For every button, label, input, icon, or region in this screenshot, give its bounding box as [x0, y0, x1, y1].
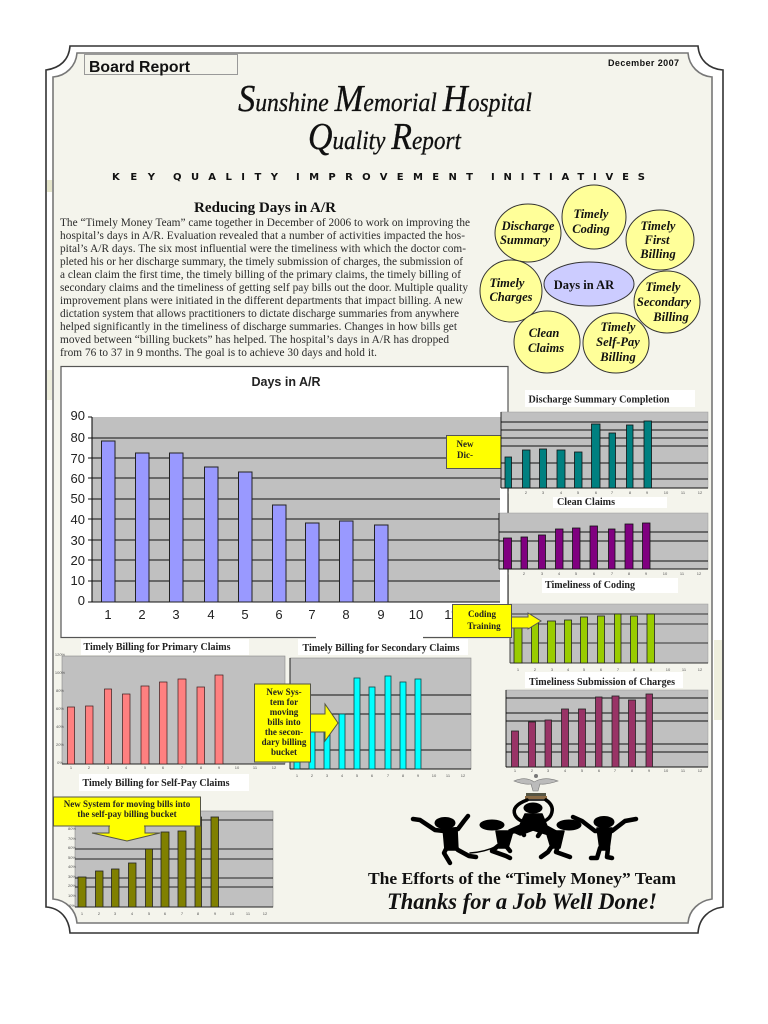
bubble: timely first billing: First — [643, 233, 670, 247]
chart: timeliness submission of charges — [506, 672, 708, 773]
main chart: days in A/R: 5 — [241, 607, 249, 622]
article text: improvement plans were initiated in the different departments that impact billing. A new — [60, 295, 464, 307]
main chart: days in A/R: 90 — [71, 408, 85, 423]
chart: timeliness submission of charges: 11 — [681, 768, 686, 773]
main chart: days in A/R: 50 — [71, 491, 85, 506]
chart: timely billing for secondary claims: Timely Billing for Secondary Claims — [302, 643, 460, 654]
main chart: days in A/R: 10 — [71, 573, 85, 588]
chart: timely billing for self-pay claims: 60% — [68, 845, 76, 850]
bubble: timely self-pay billing: Timely — [601, 320, 636, 334]
board report label: Board Report — [89, 59, 191, 76]
chart: timeliness submission of charges: 1 — [514, 768, 517, 773]
chart: timely billing for primary claims: Timely Billing for Primary Claims — [84, 642, 231, 653]
chart: timely billing for primary claims: 12 — [272, 765, 277, 770]
title: Quality Report — [308, 116, 462, 158]
chart: timeliness of coding: 8 — [633, 667, 636, 672]
article text: hospital’s days in A/R. Evaluation revealed that a number of activities impacted the hos- — [60, 230, 465, 242]
article text: secondary claims and the timeliness of getting self pay bills out the door. Multiple quality — [60, 282, 468, 294]
chart: timely billing for self-pay claims: 11 — [246, 911, 251, 916]
callout: new dictation: Dic- — [457, 450, 473, 460]
bubble: timely coding: Coding — [572, 222, 610, 236]
chart: timeliness submission of charges: Timeliness Submission of Charges — [529, 677, 675, 688]
chart: timely billing for primary claims: 7 — [181, 765, 184, 770]
page frame — [46, 46, 723, 933]
chart: timely billing for primary claims: 60% — [56, 706, 64, 711]
chart: clean claims: 4 — [558, 571, 561, 576]
chart: timeliness submission of charges: 5 — [581, 768, 584, 773]
callout: coding training: Coding — [468, 609, 497, 619]
main chart: days in A/R: 10 — [409, 607, 423, 622]
chart: timely billing for primary claims: 120% — [55, 652, 66, 657]
chart: timeliness of coding: 2 — [534, 667, 537, 672]
chart: timely billing for secondary claims: 5 — [356, 773, 359, 778]
chart: timely billing for self-pay claims: 30% — [68, 874, 76, 879]
callout: new system secondary billing: the secon- — [265, 727, 303, 737]
chart: clean claims: 12 — [697, 571, 702, 576]
chart: discharge summary completion: 1 — [507, 490, 510, 495]
icon: trophy on books — [514, 774, 558, 801]
bubble: timely coding: Timely — [574, 207, 609, 221]
bubble: discharge summary: Summary — [500, 233, 550, 247]
chart: timeliness submission of charges: 9 — [648, 768, 651, 773]
chart: timely billing for primary claims: 2 — [88, 765, 91, 770]
chart: discharge summary completion: 9 — [646, 490, 649, 495]
chart: clean claims: 10 — [663, 571, 668, 576]
chart: timely billing for primary claims: 40% — [56, 724, 64, 729]
main chart: days in A/R — [61, 366, 508, 640]
chart: discharge summary completion: 2 — [525, 490, 528, 495]
chart: timely billing for secondary claims: 4 — [341, 773, 344, 778]
chart: timely billing for primary claims: 0% — [57, 760, 63, 765]
chart: timeliness submission of charges: 4 — [564, 768, 567, 773]
callout: new system secondary billing: bucket — [271, 747, 297, 757]
bubble: timely secondary billing: Secondary — [637, 295, 692, 309]
chart: timely billing for secondary claims: 7 — [387, 773, 390, 778]
figure: far left — [413, 816, 497, 863]
main chart: days in A/R: 7 — [308, 607, 316, 622]
chart: timely billing for primary claims: 3 — [107, 765, 110, 770]
board report label — [84, 54, 238, 76]
article text: The “Timely Money Team” came together in December of 2006 to work on improving the — [60, 217, 470, 229]
callout: new system self-pay billing — [54, 797, 200, 841]
figure: inner left — [480, 820, 524, 858]
chart: discharge summary completion: 12 — [698, 490, 703, 495]
subtitle: INITIATIVES — [491, 172, 645, 183]
chart: clean claims: 1 — [507, 571, 510, 576]
chart: timeliness submission of charges: 10 — [664, 768, 669, 773]
chart: clean claims: 11 — [680, 571, 685, 576]
chart: clean claims: 8 — [628, 571, 631, 576]
thank-you message: Thanks for a Job Well Done! — [387, 889, 657, 914]
chart: clean claims: 2 — [523, 571, 526, 576]
main chart: days in A/R: 0 — [78, 593, 85, 608]
article text: a clean claim the first time, the timely billing of the primary claims, the timely billing of — [60, 269, 461, 281]
report date: December 2007 — [608, 58, 679, 68]
chart: discharge summary completion: 11 — [681, 490, 686, 495]
bubble: timely charges — [480, 260, 542, 322]
main chart: days in A/R: 70 — [71, 451, 85, 466]
chart: timely billing for self-pay claims: Timely Billing for Self-Pay Claims — [82, 778, 230, 789]
callout: new dictation — [446, 436, 502, 468]
chart: timeliness of coding: 5 — [583, 667, 586, 672]
bubble: clean claims: Claims — [528, 341, 564, 355]
bubble: timely first billing — [626, 210, 694, 270]
chart: timeliness of coding — [510, 578, 708, 672]
chart: timely billing for primary claims: 5 — [144, 765, 147, 770]
main chart: days in A/R: 6 — [275, 607, 283, 622]
main chart: days in A/R: 11 — [444, 607, 458, 622]
article text — [60, 217, 470, 359]
chart: timely billing for primary claims: 8 — [200, 765, 203, 770]
bubble: timely first billing: Billing — [639, 247, 676, 261]
bubble: timely first billing: Timely — [641, 219, 676, 233]
chart: clean claims: 5 — [575, 571, 578, 576]
chart: timeliness submission of charges: 6 — [598, 768, 601, 773]
chart: discharge summary completion: 8 — [629, 490, 632, 495]
chart: timeliness of coding: Timeliness of Coding — [545, 580, 635, 591]
bubble: clean claims — [514, 311, 580, 373]
main chart: days in A/R: 9 — [377, 607, 385, 622]
chart: timeliness submission of charges: 3 — [547, 768, 550, 773]
chart: clean claims: 9 — [645, 571, 648, 576]
figure: far right — [573, 816, 636, 858]
chart: timely billing for secondary claims: 2 — [311, 773, 314, 778]
chart: timely billing for self-pay claims: 50% — [68, 855, 76, 860]
chart: clean claims: 3 — [541, 571, 544, 576]
bubble: timely self-pay billing: Billing — [599, 350, 636, 364]
bubble diagram: days in AR drivers — [480, 185, 700, 373]
bubble: timely secondary billing: Billing — [652, 310, 689, 324]
chart: timely billing for secondary claims: 11 — [446, 773, 451, 778]
chart: discharge summary completion: 4 — [560, 490, 563, 495]
callout: new system secondary billing: dary billing — [262, 737, 307, 747]
chart: timely billing for self-pay claims: 0% — [69, 903, 75, 908]
bubble: discharge summary — [495, 204, 561, 262]
chart: timely billing for secondary claims: 12 — [461, 773, 466, 778]
title: Sunshine Memorial Hospital — [238, 78, 532, 120]
chart: timeliness of coding: 12 — [698, 667, 703, 672]
callout: new dictation: New — [456, 439, 474, 449]
chart: timeliness of coding: 6 — [600, 667, 603, 672]
chart: timely billing for primary claims: 1 — [70, 765, 73, 770]
figure: inner right — [538, 820, 581, 857]
chart: timeliness submission of charges: 8 — [631, 768, 634, 773]
main chart: days in A/R: 30 — [71, 533, 85, 548]
chart: timeliness of coding: 4 — [567, 667, 570, 672]
article heading: Reducing Days in A/R — [194, 200, 337, 216]
callout: new system self-pay billing: the self-pay billing bucket — [77, 809, 177, 819]
chart: timeliness submission of charges: 2 — [531, 768, 534, 773]
chart: timely billing for secondary claims: 3 — [326, 773, 329, 778]
chart: timely billing for primary claims: 11 — [253, 765, 258, 770]
chart: clean claims: 6 — [593, 571, 596, 576]
chart: timeliness submission of charges: 12 — [698, 768, 703, 773]
chart: timely billing for primary claims: 4 — [125, 765, 128, 770]
chart title: Days in A/R — [252, 375, 320, 389]
chart: timely billing for primary claims: 10 — [235, 765, 240, 770]
chart: timely billing for self-pay claims: 3 — [114, 911, 117, 916]
chart: timeliness of coding: 1 — [517, 667, 520, 672]
chart: timely billing for self-pay claims: 6 — [164, 911, 167, 916]
subtitle: IMPROVEMENT — [296, 172, 473, 183]
main chart: days in A/R: 60 — [71, 471, 85, 486]
main chart: days in A/R: 40 — [71, 512, 85, 527]
chart: timely billing for self-pay claims: 8 — [197, 911, 200, 916]
bubble: days in AR — [544, 262, 634, 306]
chart: timely billing for primary claims: 20% — [56, 742, 64, 747]
chart: timely billing for self-pay claims: 7 — [181, 911, 184, 916]
chart: discharge summary completion: 7 — [611, 490, 614, 495]
callout: new system secondary billing: tem for — [270, 697, 298, 707]
callout: new system secondary billing: New Sys- — [266, 687, 302, 697]
chart: timely billing for self-pay claims: 40% — [68, 864, 76, 869]
chart: timely billing for self-pay claims: 70% — [68, 836, 76, 841]
callout: coding training — [452, 604, 541, 638]
chart: timeliness of coding: 3 — [551, 667, 554, 672]
bubble: timely coding — [562, 185, 626, 249]
subtitle — [112, 172, 645, 183]
chart: discharge summary completion: 6 — [595, 490, 598, 495]
chart: timeliness submission of charges: 7 — [614, 768, 617, 773]
article text: moved between “billing buckets” has helped. The hospital’s days in A/R has dropped — [60, 334, 449, 346]
callout: new system secondary billing: moving — [270, 707, 299, 717]
article text: pital’s A/R days. The six most influential were the timeliness with which the doctor com- — [60, 243, 466, 255]
callout: new system self-pay billing: New System for moving bills into — [64, 799, 191, 809]
chart: timely billing for primary claims — [55, 639, 285, 770]
chart: timely billing for self-pay claims: 12 — [263, 911, 268, 916]
chart: timeliness of coding: 11 — [682, 667, 687, 672]
chart: timely billing for secondary claims: 10 — [432, 773, 437, 778]
chart: timely billing for self-pay claims: 80% — [68, 826, 76, 831]
chart: discharge summary completion — [501, 390, 708, 495]
bubble: timely secondary billing: Timely — [646, 280, 681, 294]
chart: clean claims: 7 — [611, 571, 614, 576]
main chart: days in A/R: 1 — [104, 607, 112, 622]
chart: discharge summary completion: Discharge Summary Completion — [528, 394, 670, 406]
title — [238, 78, 532, 158]
bubble: clean claims: Clean — [529, 326, 559, 340]
subtitle: KEY — [112, 172, 156, 183]
chart: timely billing for self-pay claims: 5 — [148, 911, 151, 916]
chart: discharge summary completion: 5 — [577, 490, 580, 495]
main chart: days in A/R: 8 — [342, 607, 350, 622]
chart: timely billing for secondary claims: 9 — [417, 773, 420, 778]
chart: timely billing for self-pay claims: 10 — [230, 911, 235, 916]
main chart: days in A/R: 2 — [138, 607, 146, 622]
bubble: timely self-pay billing: Self-Pay — [596, 335, 640, 349]
bubble: days in AR: Days in AR — [554, 278, 615, 292]
article text: from 76 to 37 in 9 months. The goal is to achieve 30 days and hold it. — [60, 347, 377, 359]
chart: timely billing for self-pay claims: 20% — [68, 883, 76, 888]
chart: timely billing for self-pay claims: 4 — [131, 911, 134, 916]
chart: timely billing for secondary claims: 6 — [371, 773, 374, 778]
chart: clean claims — [499, 497, 708, 576]
figure: center — [509, 800, 558, 835]
chart: timely billing for self-pay claims — [68, 774, 273, 916]
article text: pleted his or her discharge summary, the timely submission of charges, the submission of — [60, 256, 463, 268]
chart: timely billing for self-pay claims: 1 — [81, 911, 84, 916]
chart: timely billing for self-pay claims: 9 — [214, 911, 217, 916]
chart: timely billing for secondary claims: 8 — [402, 773, 405, 778]
bubble: discharge summary: Discharge — [501, 219, 555, 233]
bubble: timely secondary billing — [634, 271, 700, 333]
chart: timely billing for primary claims: 100% — [55, 670, 66, 675]
article text: dictation system that allows practitioners to dictate discharge summaries from anywhere — [60, 308, 459, 320]
main chart: days in A/R: 4 — [207, 607, 215, 622]
bubble: timely self-pay billing — [583, 313, 649, 373]
chart: timely billing for secondary claims — [290, 639, 471, 778]
chart: timely billing for self-pay claims: 10% — [68, 893, 76, 898]
chart: discharge summary completion: 10 — [664, 490, 669, 495]
callout: new system secondary billing — [254, 684, 338, 762]
illustration: team lifting a trophy — [413, 774, 636, 863]
callout: coding training: Training — [467, 621, 501, 631]
callout: new system secondary billing: bills into — [267, 717, 301, 727]
chart: discharge summary completion: 3 — [542, 490, 545, 495]
main chart: days in A/R: 20 — [71, 553, 85, 568]
bubble: timely charges: Timely — [490, 276, 525, 290]
subtitle: QUALITY — [173, 172, 279, 183]
chart: timely billing for primary claims: 9 — [218, 765, 221, 770]
main chart: days in A/R: 3 — [172, 607, 180, 622]
closing line: The Efforts of the “Timely Money” Team — [368, 869, 676, 888]
chart: timely billing for secondary claims: 1 — [296, 773, 299, 778]
chart: timeliness of coding: 7 — [617, 667, 620, 672]
article text: helped significantly in the timeliness of discharge summaries. Changes in how bills get — [60, 321, 458, 333]
chart: timely billing for primary claims: 6 — [162, 765, 165, 770]
chart: timely billing for self-pay claims: 2 — [98, 911, 101, 916]
main chart: days in A/R: 80 — [71, 430, 85, 445]
chart: clean claims: Clean Claims — [557, 497, 615, 508]
chart: timeliness of coding: 9 — [650, 667, 653, 672]
bubble: timely charges: Charges — [489, 290, 533, 304]
chart: timely billing for primary claims: 80% — [56, 688, 64, 693]
chart: timeliness of coding: 10 — [666, 667, 671, 672]
